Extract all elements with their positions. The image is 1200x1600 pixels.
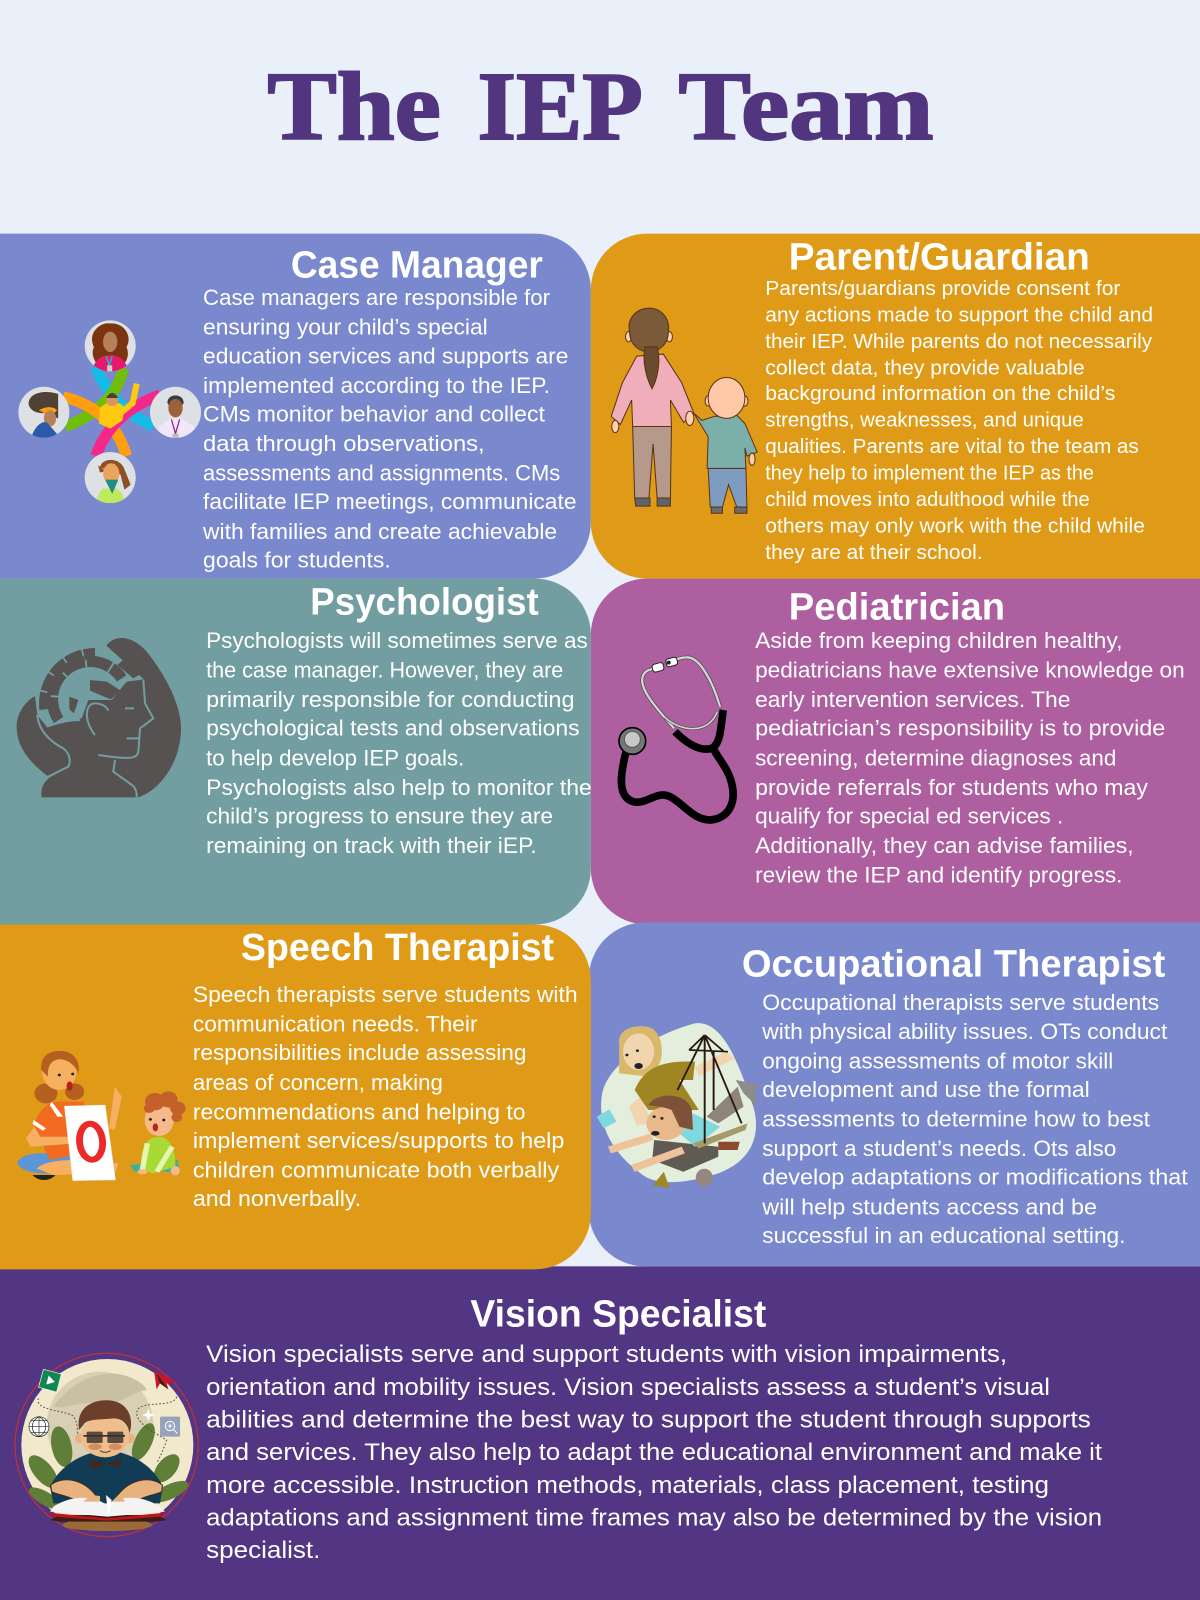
text: psychologist: the case manager. However, they are: [206, 658, 563, 683]
text: parent guardian: any actions made to support the child and: [765, 304, 1153, 326]
text: occupational therapist: [761, 990, 1189, 1248]
text: pediatrician: early intervention services. The: [755, 687, 1070, 712]
title: [267, 53, 934, 161]
text: speech therapist: areas of concern, making: [193, 1070, 443, 1095]
text: pediatrician: review the IEP and identify progress.: [755, 863, 1122, 888]
text: vision specialist: [206, 1341, 1102, 1564]
icon: stethoscope: [619, 657, 733, 820]
text: parent guardian: collect data, they provide valuable: [765, 357, 1085, 379]
text: vision specialist: Vision specialists serve and support students with vision impairments,: [206, 1341, 1007, 1368]
heading: pediatrician: Pediatrician: [789, 585, 1005, 627]
panel: pediatrician: [591, 579, 1200, 924]
icon: therapist and child on swing: [597, 1023, 761, 1188]
heading: parent guardian: Parent/Guardian: [789, 235, 1090, 277]
text: occupational therapist: Occupational therapists serve students: [762, 990, 1159, 1015]
heading: occupational therapist: Occupational Therapist: [742, 943, 1166, 985]
heading: case manager: Case Manager: [291, 244, 543, 286]
text: occupational therapist: ongoing assessments of motor skill: [762, 1048, 1113, 1073]
text: occupational therapist: will help students access and be: [761, 1194, 1097, 1219]
text: case manager: education services and supports are: [203, 343, 568, 368]
heading: vision specialist: Vision Specialist: [470, 1293, 767, 1335]
text: parent guardian: others may only work with the child while: [765, 516, 1145, 538]
text: pediatrician: qualify for special ed services .: [755, 803, 1063, 828]
text: psychologist: primarily responsible for conducting: [206, 687, 574, 712]
text: speech therapist: recommendations and helping to: [193, 1099, 526, 1124]
text: occupational therapist: with physical ability issues. OTs conduct: [761, 1019, 1168, 1044]
text: occupational therapist: successful in an educational setting.: [762, 1223, 1126, 1248]
text: speech therapist: Speech therapists serve students with: [193, 982, 578, 1007]
text: case manager: Case managers are responsible for: [203, 285, 551, 310]
text: psychologist: to help develop IEP goals.: [206, 745, 464, 770]
text: pediatrician: screening, determine diagnoses and: [755, 745, 1116, 770]
text: case manager: [202, 285, 577, 572]
panel: psychologist: [0, 579, 592, 924]
text: case manager: assessments and assignments. CMs: [203, 461, 560, 486]
text: vision specialist: orientation and mobility issues. Vision specialists assess a student’s visual: [206, 1374, 1050, 1401]
icon: teacher showing letter card to child: [17, 1051, 186, 1181]
panel: occupational therapist: [589, 922, 1200, 1266]
icon: parent holding child's hand: [611, 308, 757, 513]
text: pediatrician: Additionally, they can advise families,: [755, 833, 1134, 858]
text: psychologist: remaining on track with their iEP.: [206, 833, 537, 858]
text: vision specialist: and services. They also help to adapt the educational environment and make it: [206, 1439, 1102, 1466]
text: speech therapist: communication needs. Their: [193, 1012, 478, 1037]
icon: head with brain maze: [17, 638, 181, 797]
text: vision specialist: abilities and determine the best way to support the student through supports: [206, 1407, 1091, 1434]
text: psychologist: [206, 628, 592, 858]
text: occupational therapist: development and use the formal: [762, 1077, 1090, 1102]
text: parent guardian: Parents/guardians provide consent for: [765, 278, 1121, 300]
title: Team: [679, 53, 934, 161]
icon: student reading braille: [15, 1353, 198, 1537]
title: IEP: [478, 53, 643, 161]
text: case manager: goals for students.: [203, 547, 391, 572]
text: case manager: CMs monitor behavior and collect: [203, 401, 546, 426]
text: pediatrician: [755, 628, 1185, 888]
text: psychologist: Psychologists also help to monitor the: [206, 775, 592, 800]
text: parent guardian: qualities. Parents are vital to the team as: [765, 436, 1139, 458]
text: pediatrician: pediatricians have extensive knowledge on: [755, 658, 1185, 683]
text: vision specialist: adaptations and assignment time frames may also be determined by the vision: [206, 1505, 1102, 1532]
text: case manager: implemented according to the IEP.: [203, 373, 550, 398]
panel: parent guardian: [591, 234, 1200, 579]
text: parent guardian: they are at their school.: [765, 542, 983, 564]
text: psychologist: Psychologists will sometimes serve as: [206, 628, 588, 653]
text: pediatrician: provide referrals for students who may: [755, 775, 1149, 800]
text: speech therapist: children communicate both verbally: [193, 1158, 560, 1183]
icon: team of four around a student: [18, 320, 201, 505]
text: psychologist: psychological tests and observations: [206, 716, 580, 741]
text: case manager: with families and create achievable: [202, 519, 557, 544]
text: vision specialist: specialist.: [206, 1537, 320, 1564]
text: speech therapist: implement services/supports to help: [193, 1128, 564, 1153]
text: parent guardian: they help to implement the IEP as the: [765, 463, 1094, 485]
text: parent guardian: their IEP. While parents do not necessarily: [765, 331, 1153, 353]
text: pediatrician: pediatrician’s responsibility is to provide: [755, 716, 1165, 741]
text: parent guardian: [765, 278, 1153, 564]
text: parent guardian: child moves into adulthood while the: [765, 489, 1090, 511]
panel: vision specialist: [0, 1266, 1200, 1600]
text: occupational therapist: develop adaptations or modifications that: [762, 1165, 1189, 1190]
text: parent guardian: strengths, weaknesses, and unique: [765, 410, 1084, 432]
text: speech therapist: responsibilities include assessing: [193, 1040, 527, 1065]
text: parent guardian: background information on the child’s: [765, 383, 1115, 405]
text: occupational therapist: assessments to determine how to best: [762, 1107, 1151, 1132]
text: speech therapist: [193, 982, 578, 1211]
heading: speech therapist: Speech Therapist: [241, 926, 555, 968]
text: case manager: data through observations,: [203, 431, 485, 456]
title: The: [267, 53, 441, 161]
text: psychologist: child’s progress to ensure they are: [206, 803, 553, 828]
text: case manager: facilitate IEP meetings, communicate: [203, 489, 577, 514]
heading: psychologist: Psychologist: [310, 580, 539, 622]
text: pediatrician: Aside from keeping children healthy,: [755, 628, 1122, 653]
panel: case manager: [0, 234, 591, 579]
text: vision specialist: more accessible. Instruction methods, materials, class placement, testing: [206, 1472, 1049, 1499]
text: speech therapist: and nonverbally.: [193, 1186, 361, 1211]
text: occupational therapist: support a student’s needs. Ots also: [762, 1136, 1116, 1161]
text: case manager: ensuring your child’s special: [203, 315, 488, 340]
panel: speech therapist: [0, 924, 591, 1269]
